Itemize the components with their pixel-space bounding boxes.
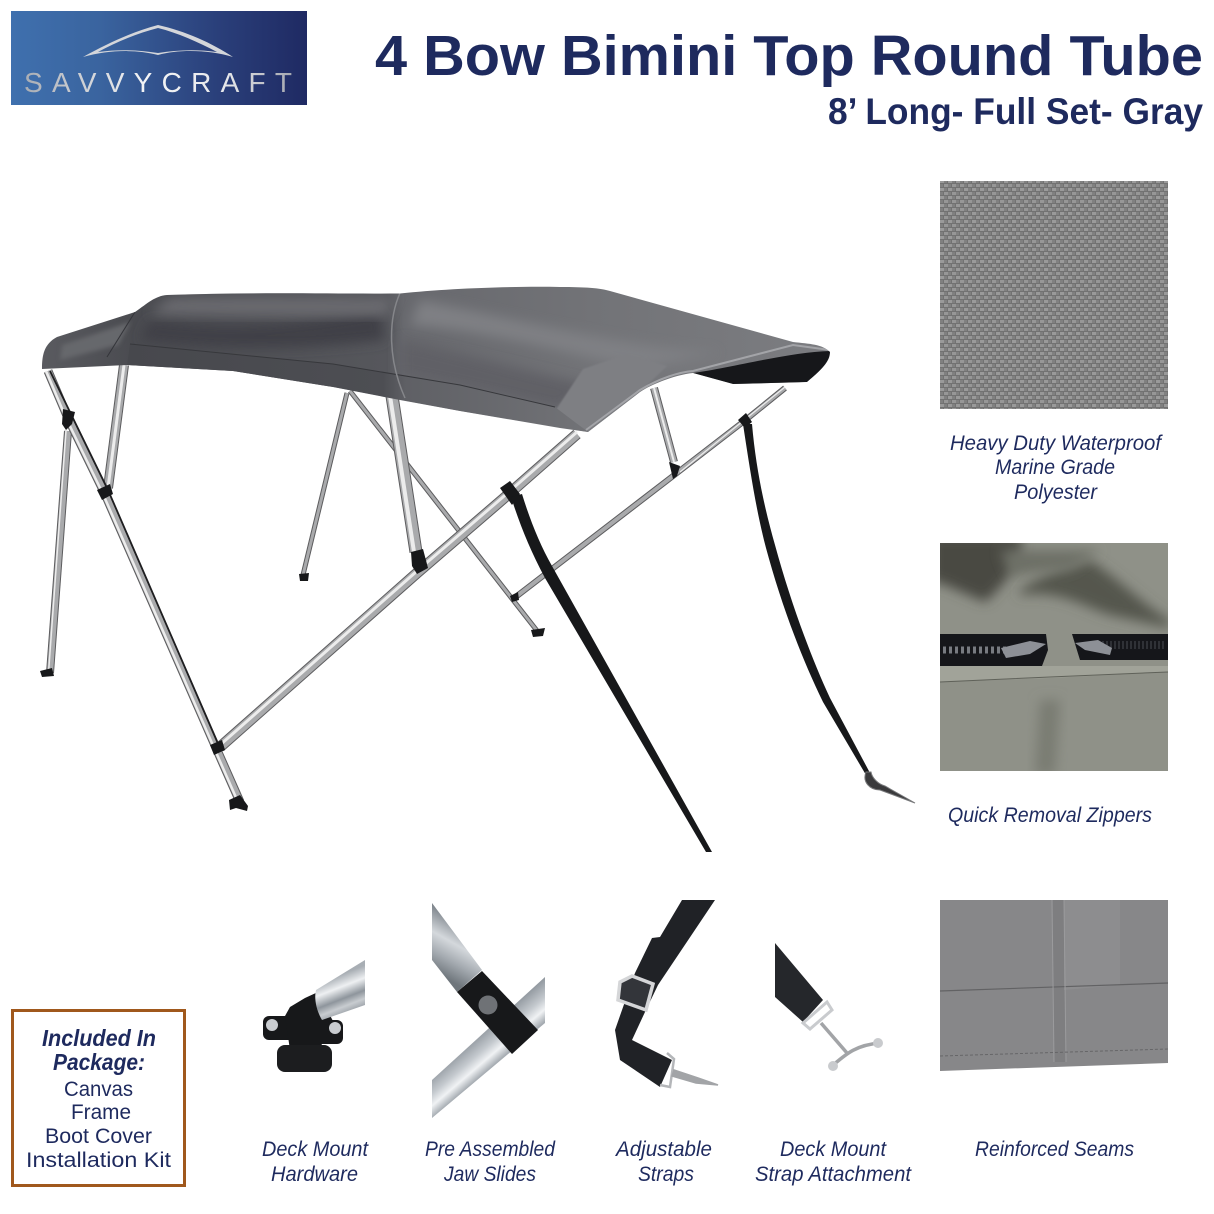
canvas canopy	[42, 287, 830, 432]
joints and feet	[40, 409, 752, 811]
upright centre	[390, 396, 416, 552]
swatch: reinforced seam	[940, 900, 1168, 1071]
caption: jaw slides: Jaw Slides	[443, 1163, 536, 1186]
caption: seams: Reinforced Seams	[975, 1138, 1134, 1161]
brace far side	[350, 391, 538, 632]
included in package box: Canvas	[64, 1077, 133, 1101]
subtitle: 8’ Long- Full Set- Gray	[828, 91, 1203, 132]
straps	[511, 424, 915, 852]
caption: jaw slides: Pre Assembled	[425, 1138, 556, 1161]
rear leg far left	[48, 431, 68, 673]
strap front	[511, 494, 712, 852]
corner reinforcement patch	[557, 364, 658, 432]
caption: polyester	[950, 432, 1163, 504]
title: 4 Bow Bimini Top Round Tube	[375, 24, 1203, 88]
caption: zippers: Quick Removal Zippers	[948, 804, 1152, 827]
caption: deck mount hardware	[262, 1138, 369, 1186]
caption: polyester: Polyester	[1014, 481, 1098, 504]
detail: adjustable strap	[615, 900, 718, 1087]
main diagonal tube	[46, 371, 240, 802]
strap rear	[743, 424, 870, 775]
logo wordmark: SAVVYCRAFT	[24, 67, 292, 98]
caption: deck mount hardware: Deck Mount	[262, 1138, 369, 1161]
included in package box	[12, 1010, 184, 1186]
swatch: polyester weave	[940, 181, 1168, 409]
caption: polyester: Heavy Duty Waterproof	[950, 432, 1163, 455]
detail: jaw slide	[432, 903, 545, 1118]
caption: polyester: Marine Grade	[995, 456, 1115, 479]
hem band	[128, 365, 588, 432]
front bow tube	[513, 387, 785, 599]
canopy wrinkles and shading	[60, 293, 830, 432]
swatch: zipper	[930, 535, 1170, 775]
zipper pulls	[1001, 640, 1112, 658]
caption: deck mount hardware: Hardware	[271, 1163, 358, 1186]
logo: Savvycraft	[11, 11, 307, 105]
main bow tube	[220, 432, 577, 747]
included in package box: Installation Kit	[26, 1148, 171, 1172]
caption: strap attachment: Strap Attachment	[755, 1163, 912, 1186]
caption: adjustable straps: Adjustable	[614, 1138, 712, 1161]
main product: bimini top	[40, 287, 915, 852]
icon: logo canopy mark	[83, 25, 233, 57]
caption: jaw slides	[425, 1138, 556, 1186]
upright left	[108, 365, 124, 488]
included in package box: Included In	[42, 1025, 156, 1051]
caption: adjustable straps: Straps	[638, 1163, 694, 1186]
strap hook	[865, 772, 915, 803]
included in package box: Boot Cover	[45, 1124, 152, 1148]
caption: strap attachment	[755, 1138, 912, 1186]
detail: deck mount hardware	[263, 960, 365, 1072]
rear leg centre	[303, 393, 347, 575]
upright right	[654, 388, 674, 462]
included in package box: Package:	[53, 1049, 145, 1075]
zipper tape	[940, 634, 1168, 666]
included in package box: Frame	[71, 1100, 131, 1124]
caption: adjustable straps	[614, 1138, 712, 1186]
detail: strap attachment	[775, 943, 883, 1071]
caption: strap attachment: Deck Mount	[780, 1138, 887, 1161]
